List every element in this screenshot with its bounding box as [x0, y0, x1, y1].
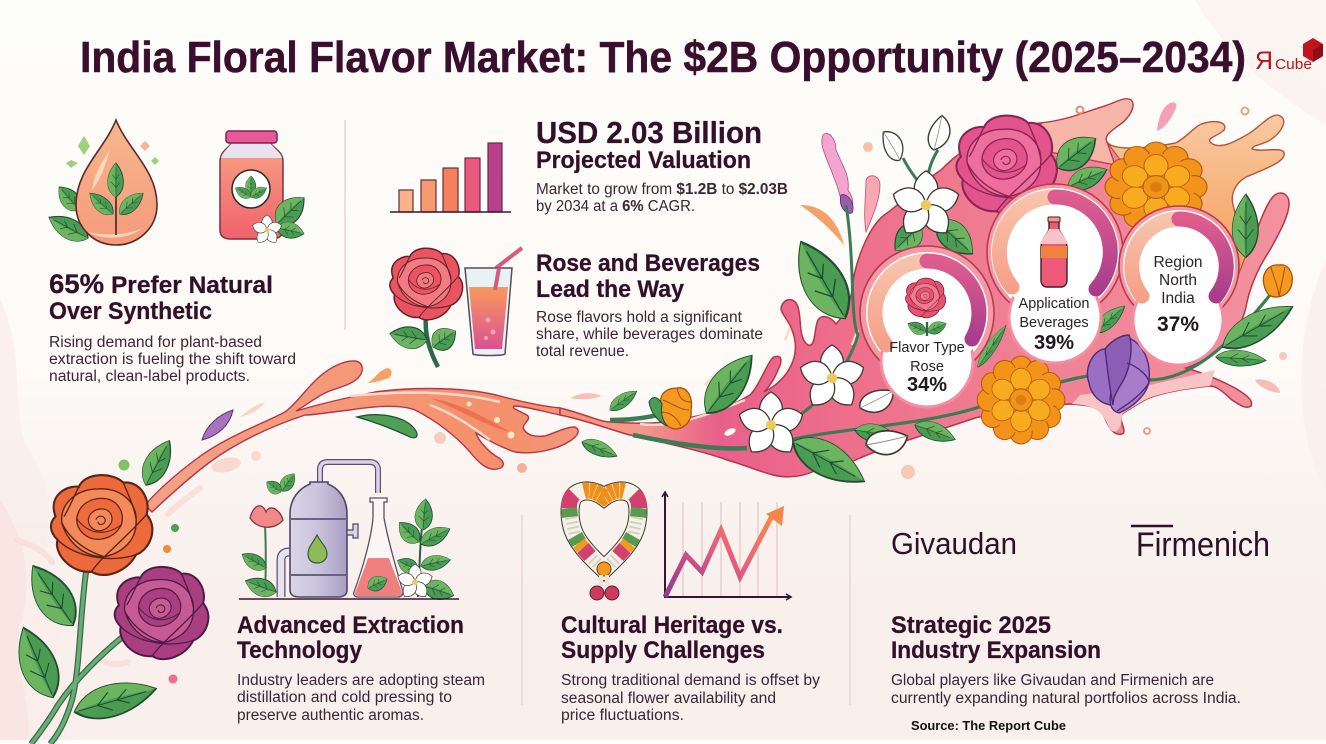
heading [536, 115, 762, 174]
text block: share, while beverages dominate [536, 326, 763, 343]
text block [536, 181, 788, 215]
label [1153, 254, 1203, 336]
label: 34% [907, 374, 947, 396]
heading: Projected Valuation [536, 147, 751, 174]
panel: region gauge [1119, 206, 1239, 365]
panel: application gauge [987, 184, 1123, 363]
floral decoration: right cluster [610, 115, 1299, 495]
floral splash ribbon [118, 99, 1289, 683]
icon: bottle [1041, 217, 1067, 287]
text block: Market to grow from $1.2B to $2.03B [536, 181, 788, 198]
text block: Rising demand for plant-based [49, 334, 262, 351]
icon: rose [905, 278, 948, 337]
panel: projected valuation [390, 115, 788, 215]
gauge arc [999, 197, 1110, 289]
logo: RCube: Cube [1275, 56, 1312, 73]
heading: Rose and Beverages [536, 250, 760, 277]
logo: RCube: Я [1255, 47, 1273, 75]
heading [891, 612, 1101, 664]
icon: rose [388, 248, 463, 367]
text block [536, 309, 763, 360]
heading: Technology [237, 637, 363, 664]
logo: RCube [1255, 38, 1323, 75]
label: 39% [1034, 332, 1074, 354]
label [1019, 296, 1089, 354]
splash: peach overlay [1040, 99, 1133, 165]
label: North [1159, 272, 1197, 289]
panel: natural preference [44, 120, 311, 385]
text block [237, 672, 485, 724]
heading: Lead the Way [536, 276, 685, 303]
panel: cultural heritage [561, 490, 820, 724]
text block: Rose flavors hold a significant [536, 309, 743, 326]
label: Beverages [1019, 315, 1089, 331]
heading: Cultural Heritage vs. [561, 612, 783, 639]
text block: currently expanding natural portfolios across India. [891, 690, 1241, 707]
bar chart [390, 143, 511, 212]
source: Source: The Report Cube [911, 718, 1066, 733]
panel: flavor type gauge [860, 246, 994, 407]
text block: extraction is fueling the shift toward [49, 351, 296, 368]
icon: oil drop with leaves [44, 120, 159, 247]
heading [536, 250, 760, 303]
label: Region [1153, 254, 1203, 271]
text block [891, 672, 1241, 707]
text block: by 2034 at a 6% CAGR. [536, 198, 695, 215]
title: India Floral Flavor Market: The $2B Opportunity (2025–2034) [80, 33, 1246, 82]
icon: orange bud right [1263, 265, 1292, 297]
stems [610, 150, 1270, 448]
splash: light lower overlay [1072, 370, 1215, 432]
heading: Industry Expansion [891, 637, 1101, 664]
icon: flower garland [569, 490, 639, 600]
text block: distillation and cold pressing to [237, 689, 452, 706]
logo: Firmenich: Firmenich [1136, 526, 1270, 564]
label: Flavor Type [889, 340, 965, 356]
heading: 65% Prefer Natural [49, 269, 273, 299]
text block: seasonal flower availability and [561, 690, 776, 707]
text block: total revenue. [536, 343, 629, 360]
heading: USD 2.03 Billion [536, 115, 762, 150]
text block [49, 334, 296, 385]
text block: preserve authentic aromas. [237, 707, 424, 724]
label [889, 340, 965, 396]
heading: Supply Challenges [561, 637, 765, 664]
gauge arc [875, 261, 979, 345]
icon: natural product jar [220, 131, 311, 245]
splash: orange overlay [1107, 115, 1284, 292]
splash: droplets and petals [822, 133, 853, 212]
text block: Strong traditional demand is offset by [561, 672, 820, 689]
icon: distillation apparatus [238, 462, 459, 604]
heading: Advanced Extraction [237, 612, 464, 639]
label: Rose [910, 359, 944, 375]
label: India [1161, 290, 1195, 307]
panel: strategic expansion [891, 526, 1270, 733]
divider [345, 120, 850, 705]
heading: Strategic 2025 [891, 612, 1051, 639]
icon: drink glass [465, 248, 522, 356]
ribbon: main splash [560, 99, 1289, 477]
text block: natural, clean-label products. [49, 368, 250, 385]
heading [237, 612, 464, 664]
icon: purple tulip [1087, 335, 1149, 413]
floral decoration: left roses [7, 475, 208, 744]
text block: Global players like Givaudan and Firmenich are [891, 672, 1214, 689]
line chart [662, 492, 791, 600]
heading [561, 612, 783, 664]
label: 37% [1157, 313, 1199, 336]
label: Application [1019, 296, 1089, 312]
logo: Givaudan: Givaudan [891, 526, 1017, 561]
panel: rose and beverages [388, 248, 763, 367]
icon: orange bud on ribbon [649, 388, 691, 429]
text block: Industry leaders are adopting steam [237, 672, 485, 689]
panel: extraction technology [237, 462, 485, 724]
text block [561, 672, 820, 724]
text block: price fluctuations. [561, 707, 684, 724]
heading [49, 269, 273, 325]
gauge arc [1132, 219, 1226, 296]
heading: Over Synthetic [49, 298, 212, 325]
ribbon: left stream [145, 361, 578, 512]
